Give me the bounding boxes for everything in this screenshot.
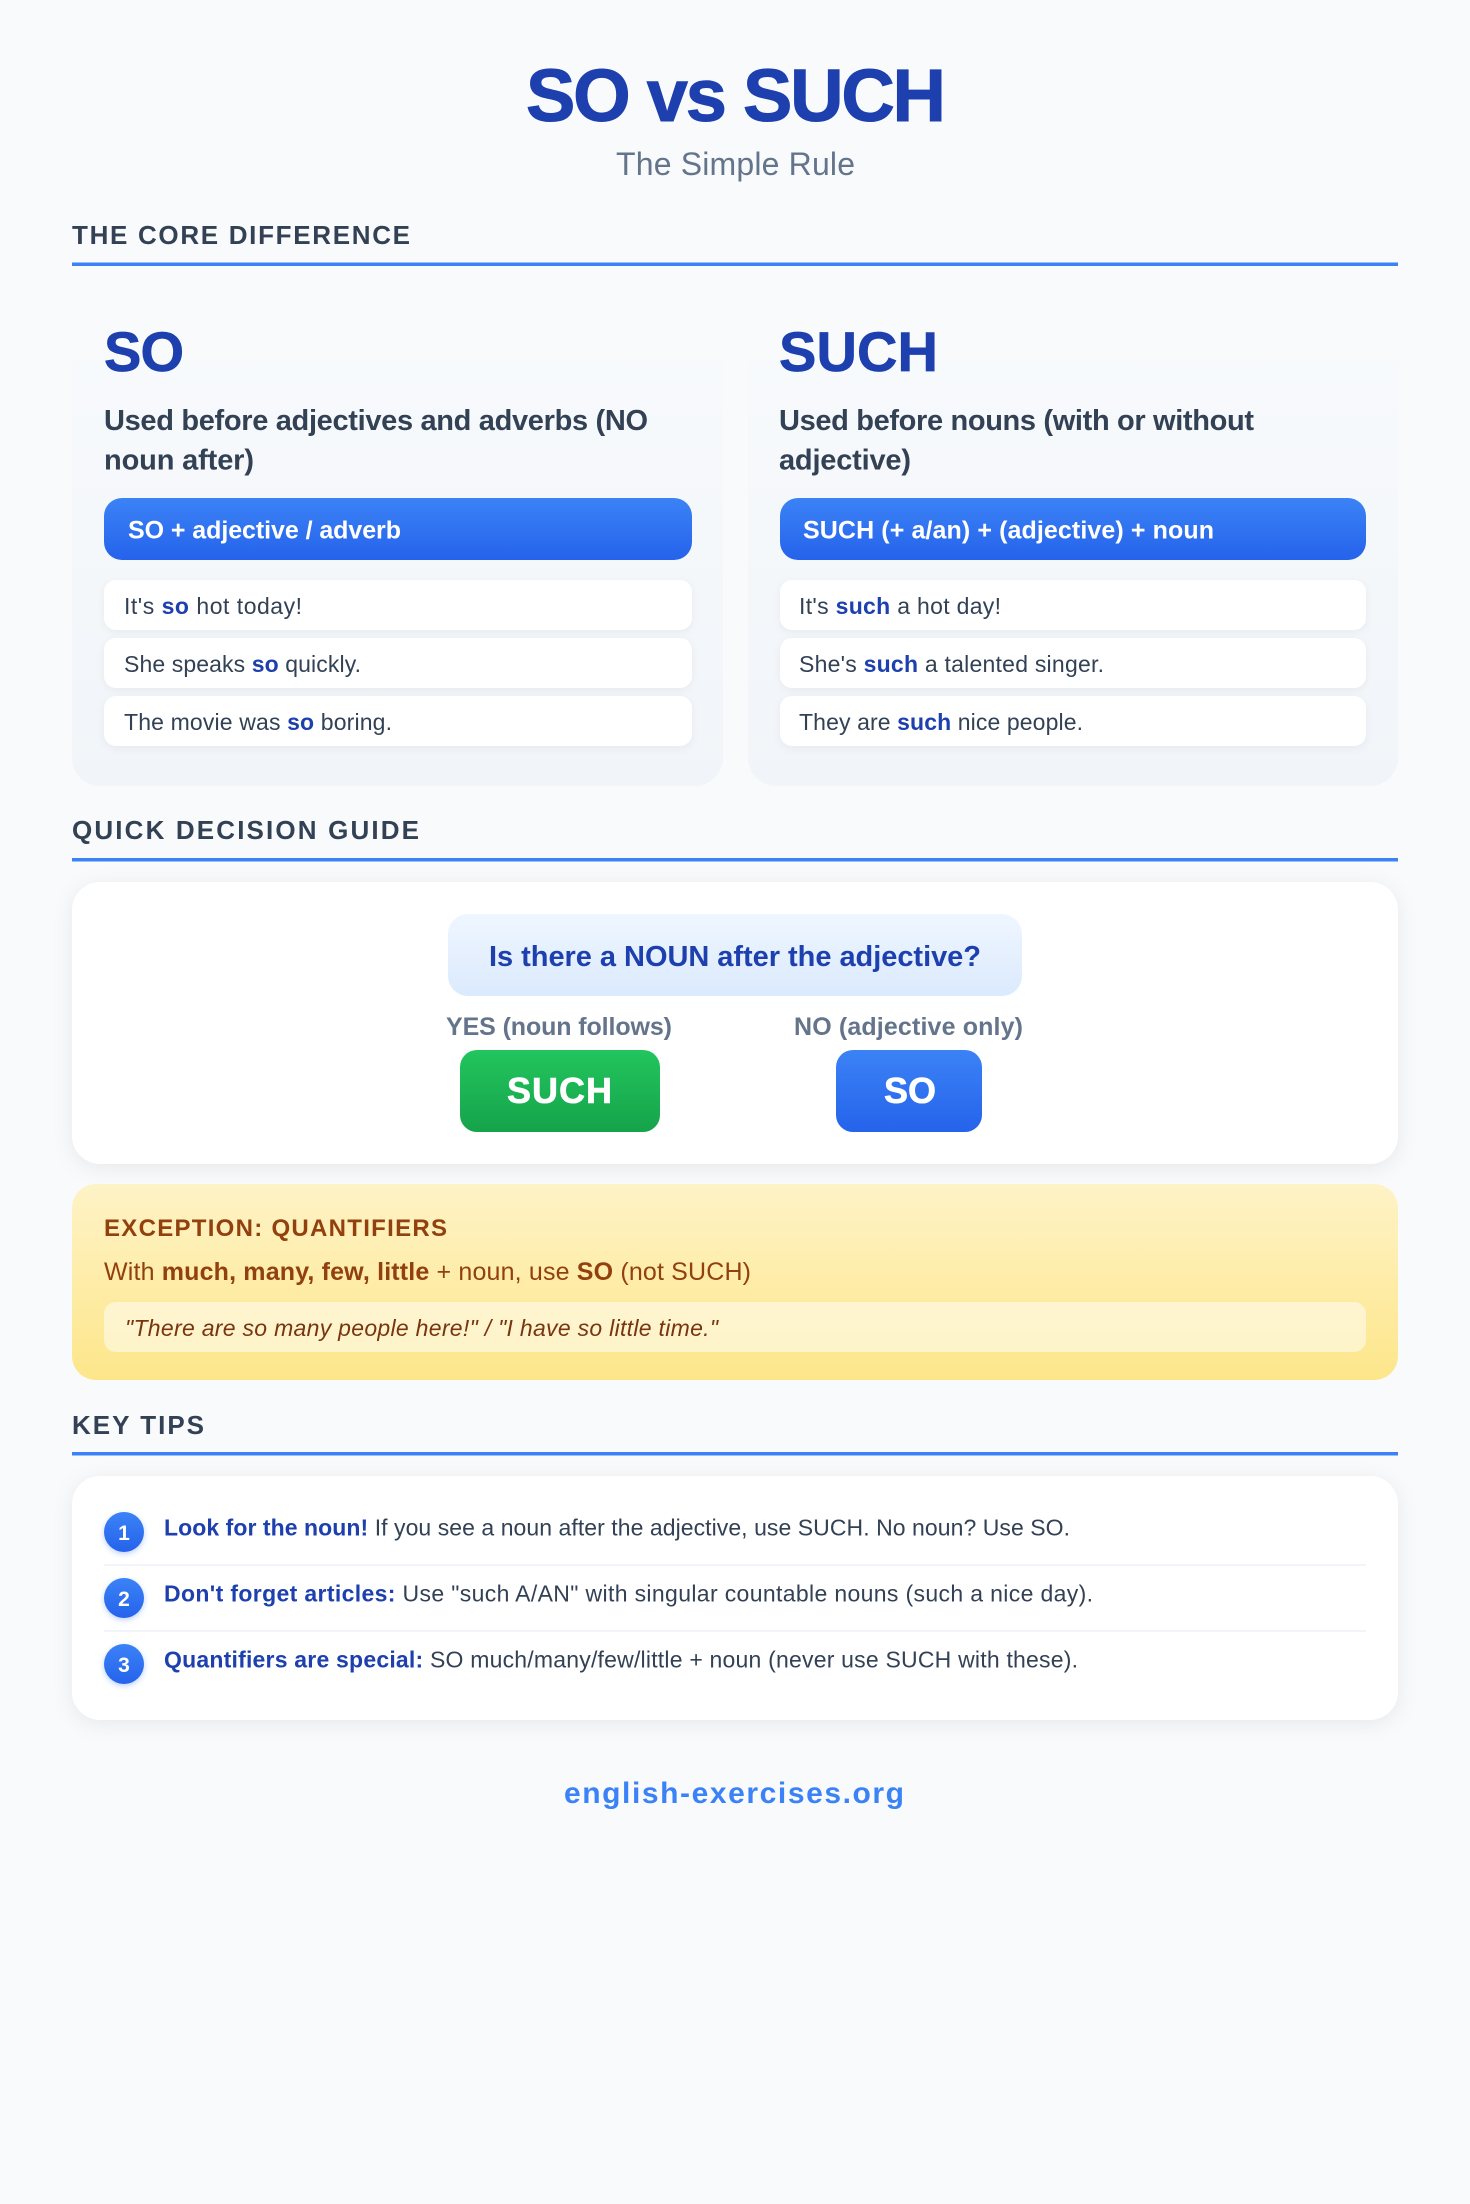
tip 2 xyxy=(104,1578,1093,1618)
SO example 2 xyxy=(104,638,692,688)
SUCH example 2 xyxy=(780,638,1366,688)
SO example 1: It's so hot today! xyxy=(124,593,302,619)
section heading: the core difference: THE CORE DIFFERENCE xyxy=(72,220,410,250)
yes branch: SUCH xyxy=(507,1070,612,1111)
exception example: "There are so many people here!" / "I have so little time." xyxy=(125,1315,720,1341)
section heading: the core difference xyxy=(72,220,1398,266)
panel: SUCH xyxy=(748,319,1398,786)
tip 1 xyxy=(104,1512,1070,1552)
SO description: Used before adjectives and adverbs (NO xyxy=(104,405,648,437)
SO description: noun after) xyxy=(104,444,254,476)
tip 3: 3 xyxy=(118,1654,130,1677)
SO example 1 xyxy=(104,580,692,630)
SO formula xyxy=(104,498,692,560)
SO formula: SO + adjective / adverb xyxy=(128,516,401,544)
question box: Is there a NOUN after the adjective? xyxy=(489,941,981,973)
SO example 3 xyxy=(104,696,692,746)
footer: english-exercises.org xyxy=(564,1777,904,1810)
SO example 2: She speaks so quickly. xyxy=(124,651,361,677)
SUCH example 3: They are such nice people. xyxy=(799,709,1083,735)
no branch xyxy=(794,1013,1023,1132)
section heading: key tips xyxy=(72,1410,1398,1456)
SUCH example 1: It's such a hot day! xyxy=(799,593,1001,619)
SUCH heading: SUCH xyxy=(779,320,938,383)
SUCH formula xyxy=(780,498,1366,560)
no branch: SO xyxy=(884,1070,936,1111)
yes branch: YES (noun follows) xyxy=(446,1013,672,1041)
tip 1: 1 xyxy=(118,1522,130,1545)
SUCH example 2: She's such a talented singer. xyxy=(799,651,1104,677)
panel: decision guide xyxy=(72,882,1398,1164)
section heading: quick decision guide: QUICK DECISION GUIDE xyxy=(72,815,419,845)
no branch: NO (adjective only) xyxy=(794,1013,1023,1041)
SO heading: SO xyxy=(104,320,184,383)
title: SO vs SUCH xyxy=(526,54,946,137)
panel: SO xyxy=(72,319,723,786)
SO description xyxy=(104,405,648,476)
yes branch xyxy=(446,1013,672,1132)
section heading: key tips: KEY TIPS xyxy=(72,1410,204,1440)
section heading: quick decision guide xyxy=(72,815,1398,862)
SUCH example 1 xyxy=(780,580,1366,630)
tip 2: 2 xyxy=(118,1588,130,1611)
exception rule: With much, many, few, little + noun, use SO (not SUCH) xyxy=(104,1258,751,1286)
question box xyxy=(448,914,1022,996)
SUCH formula: SUCH (+ a/an) + (adjective) + noun xyxy=(803,516,1214,544)
SO example 3: The movie was so boring. xyxy=(124,709,392,735)
tip 2: Don't forget articles: Use "such A/AN" with singular countable nouns (such a nice day). xyxy=(164,1580,1093,1606)
panel: exception quantifiers xyxy=(72,1184,1398,1380)
exception heading: EXCEPTION: QUANTIFIERS xyxy=(104,1215,447,1242)
tip 1: Look for the noun! If you see a noun after the adjective, use SUCH. No noun? Use SO. xyxy=(164,1514,1070,1540)
SUCH description: Used before nouns (with or without xyxy=(779,405,1254,437)
subtitle: The Simple Rule xyxy=(616,146,855,182)
exception example xyxy=(104,1302,1366,1352)
SUCH example 3 xyxy=(780,696,1366,746)
SUCH description xyxy=(779,405,1254,476)
SUCH description: adjective) xyxy=(779,444,911,476)
tip 3: Quantifiers are special: SO much/many/few/little + noun (never use SUCH with these). xyxy=(164,1646,1078,1672)
tip 3 xyxy=(104,1644,1078,1684)
panel: key tips xyxy=(72,1476,1398,1720)
